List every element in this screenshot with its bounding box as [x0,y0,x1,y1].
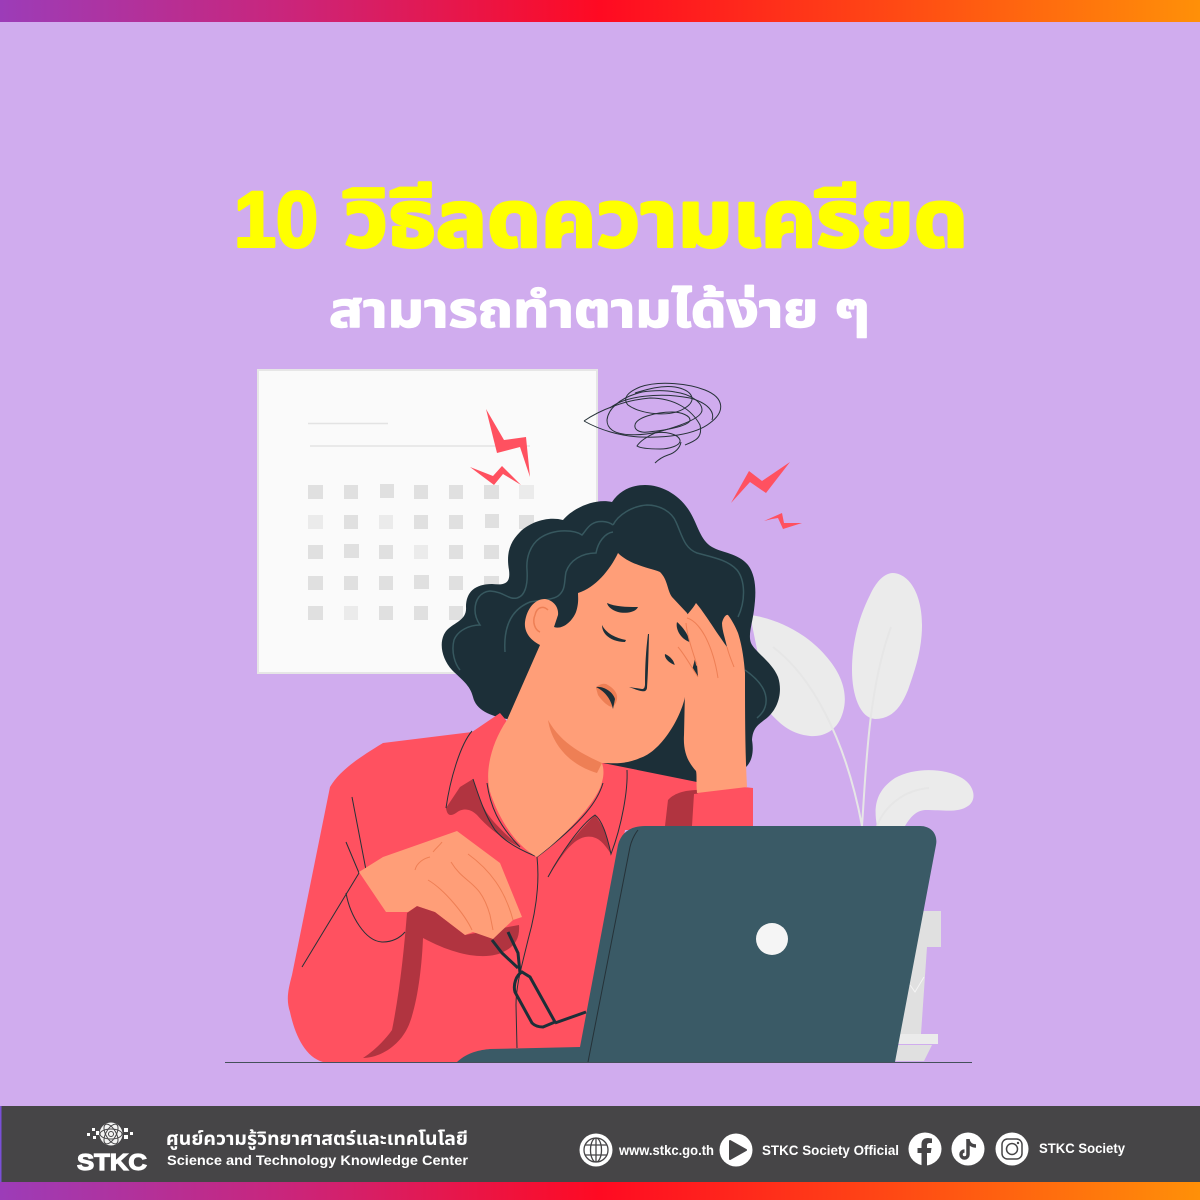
hand on forehead [671,603,747,793]
title: วิธีลดความเครียด [343,174,968,264]
icon: instagram [996,1132,1028,1166]
shirt collar shadows [446,779,520,847]
mouth [596,684,617,707]
plant [750,573,974,826]
shirt [288,713,753,1062]
organisation name: ศูนย์ความรู้วิทยาศาสตร์และเทคโนโลยี [166,1128,468,1150]
ground line [225,1062,972,1064]
organisation name: Science and Technology Knowledge Center [167,1153,469,1168]
books and stand [890,911,941,1061]
subtitle: สามารถทำตามได้ง่าย ๆ [329,284,870,338]
shirt seams [302,731,627,1048]
icon: globe [580,1134,612,1166]
channel name: STKC Society Official [762,1142,899,1158]
social account name: STKC Society [1039,1141,1125,1156]
top gradient band [0,0,1200,22]
title: 10 [234,174,318,264]
sleeve shadow [363,906,519,1058]
bottom gradient band [0,1182,1200,1200]
footer bar [0,1106,1200,1182]
calendar [258,370,597,673]
hand holding glasses [359,831,522,939]
glasses [492,932,586,1027]
hair [442,485,780,785]
face features [602,603,690,691]
icon: facebook [908,1132,942,1166]
chin shadow [548,720,602,773]
icon: play [720,1134,752,1166]
laptop logo dot [756,923,788,955]
hair strands [453,505,766,718]
ear detail [534,607,548,632]
title [234,174,968,338]
icon: lightning bolts [470,409,802,529]
icon: tiktok [952,1132,984,1166]
STKC logo [77,1122,147,1175]
woman's head and neck [488,553,700,857]
laptop [457,826,936,1062]
organisation name [166,1128,469,1168]
icon: stress scribble [584,383,721,463]
STKC logo: STKC [77,1149,147,1175]
illustration: stressed woman at laptop [225,370,974,1062]
website: www.stkc.go.th [618,1143,714,1158]
